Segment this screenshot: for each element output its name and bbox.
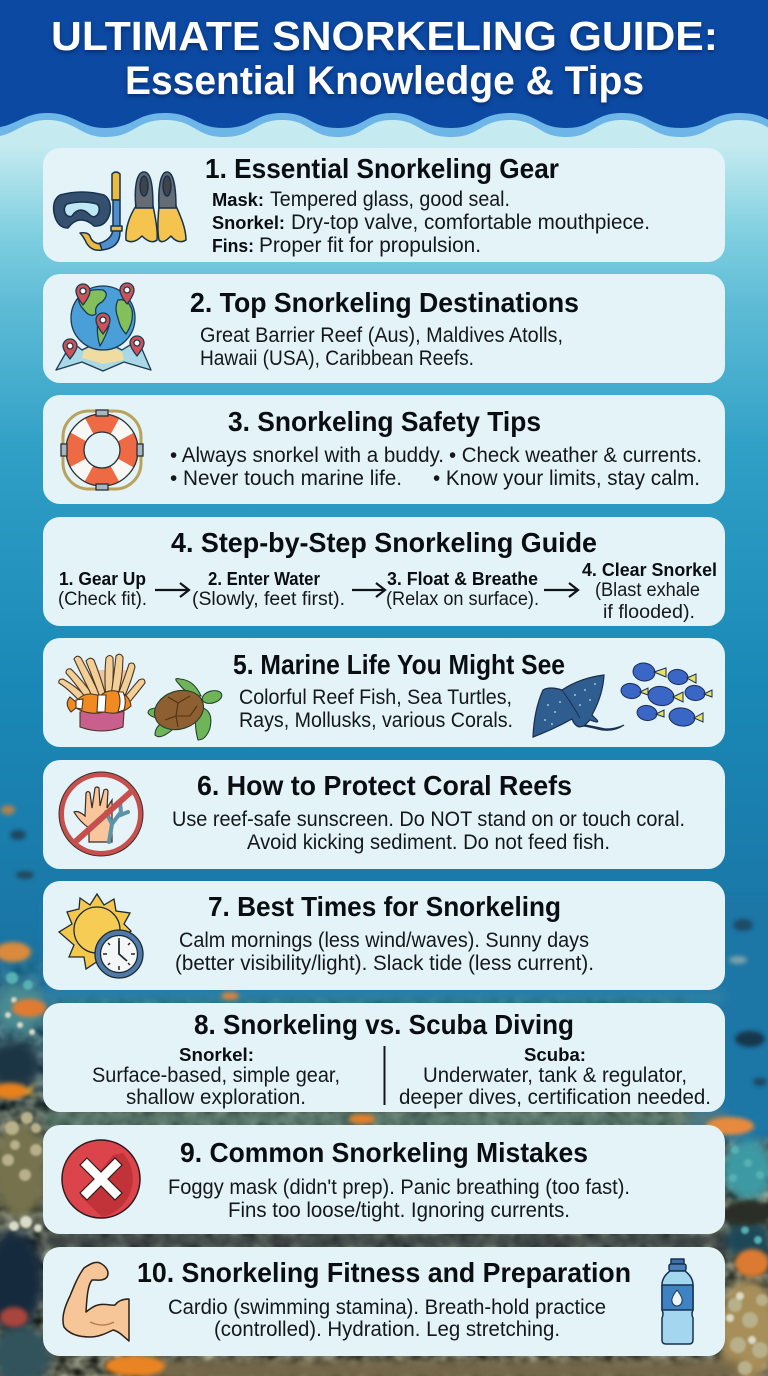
marine life list: Rays, Mollusks, various Corals.: [239, 709, 513, 732]
destination list: Great Barrier Reef (Aus), Maldives Atolls,: [200, 324, 563, 347]
snorkel column: Surface-based, simple gear,: [92, 1064, 340, 1087]
panel 3: safety tips: [43, 395, 725, 504]
arrow: [155, 583, 189, 597]
coral tips: Avoid kicking sediment. Do not feed fish.: [247, 831, 610, 854]
mistakes text: Foggy mask (didn't prep). Panic breathing (too fast).: [168, 1176, 630, 1199]
panel 1: essential gear: [43, 148, 725, 262]
destination list: [200, 324, 563, 370]
safety bullets: • Check weather & currents.: [449, 444, 702, 467]
icon: no touching coral: [59, 772, 143, 856]
gear list: Tempered glass, good seal.: [270, 188, 510, 211]
title: ULTIMATE SNORKELING GUIDE:: [51, 13, 718, 59]
panel 9: common mistakes: [43, 1125, 725, 1234]
icon: anemone and clownfish: [59, 654, 145, 731]
gear list: Proper fit for propulsion.: [259, 234, 481, 257]
marine life list: Colorful Reef Fish, Sea Turtles,: [239, 686, 512, 709]
heading: 2. Top Snorkeling Destinations: [190, 287, 579, 318]
heading: 6. How to Protect Coral Reefs: [197, 770, 572, 801]
icon: sea turtle: [148, 679, 223, 740]
heading: 10. Snorkeling Fitness and Preparation: [137, 1257, 631, 1288]
orange reef fish: [0, 805, 768, 1376]
panel 7: best times: [43, 881, 725, 990]
panel 8: snorkeling vs scuba: [43, 1003, 725, 1112]
gear list: Dry-top valve, comfortable mouthpiece.: [291, 211, 650, 234]
heading: 4. Step-by-Step Snorkeling Guide: [171, 527, 597, 558]
safety bullets: • Always snorkel with a buddy.: [170, 444, 444, 467]
heading: 7. Best Times for Snorkeling: [208, 891, 561, 922]
step 3: 3. Float & Breathe: [387, 568, 538, 589]
icon: school of blue tang: [620, 662, 712, 728]
safety bullets: • Never touch marine life.: [170, 467, 402, 490]
icon: sun and clock: [59, 894, 143, 978]
fitness text: [168, 1296, 606, 1341]
step 4: (Blast exhale: [595, 580, 700, 601]
scuba column: Scuba:: [524, 1044, 586, 1065]
fitness text: (controlled). Hydration. Leg stretching.: [214, 1318, 560, 1341]
step 1: (Check fit).: [58, 589, 147, 610]
best times text: [175, 929, 594, 975]
heading: 1. Essential Snorkeling Gear: [205, 153, 559, 184]
icon: red cross: [62, 1140, 140, 1218]
step 2: [192, 568, 345, 610]
step 3: (Relax on surface).: [386, 589, 539, 610]
panel 10: fitness and preparation: [43, 1247, 725, 1356]
snorkel column: [92, 1044, 340, 1109]
step 2: (Slowly, feet first).: [192, 589, 345, 610]
title: [51, 13, 718, 103]
mistakes text: [168, 1176, 630, 1222]
heading: 3. Snorkeling Safety Tips: [228, 406, 541, 437]
fitness text: Cardio (swimming stamina). Breath-hold practice: [168, 1296, 606, 1319]
best times text: (better visibility/light). Slack tide (less current).: [175, 952, 594, 975]
icon: spotted ray: [533, 675, 624, 737]
heading: 9. Common Snorkeling Mistakes: [180, 1137, 588, 1168]
icon: water bottle: [662, 1259, 693, 1344]
header banner with wave edge: [0, 0, 768, 137]
step 4: [582, 559, 717, 623]
step 2: 2. Enter Water: [208, 568, 320, 589]
coral tips: [172, 808, 685, 854]
arrow: [544, 583, 578, 597]
step 4: if flooded).: [603, 602, 695, 623]
gear list: Fins:: [212, 235, 254, 256]
safety bullets: • Know your limits, stay calm.: [433, 467, 700, 490]
destination list: Hawaii (USA), Caribbean Reefs.: [200, 347, 474, 370]
gear list: [212, 188, 650, 257]
icon: life ring: [61, 410, 143, 490]
snorkel column: Snorkel:: [179, 1044, 254, 1065]
gear list: Snorkel:: [212, 212, 285, 233]
step 1: 1. Gear Up: [59, 568, 146, 589]
scuba column: Underwater, tank & regulator,: [423, 1064, 687, 1087]
scuba column: deeper dives, certification needed.: [399, 1086, 711, 1109]
arrow: [352, 583, 385, 597]
scuba column: [399, 1044, 711, 1109]
gear list: Mask:: [212, 189, 264, 210]
step 4: 4. Clear Snorkel: [582, 559, 717, 580]
panel 4: step-by-step guide: [43, 517, 725, 626]
step 1: [58, 568, 147, 610]
mistakes text: Fins too loose/tight. Ignoring currents.: [228, 1199, 570, 1222]
safety bullets: [170, 444, 702, 490]
coral tips: Use reef-safe sunscreen. Do NOT stand on or touch coral.: [172, 808, 685, 831]
best times text: Calm mornings (less wind/waves). Sunny days: [179, 929, 589, 952]
icon: mask, snorkel and fins: [54, 172, 186, 250]
marine life list: [239, 686, 513, 732]
title: Essential Knowledge & Tips: [125, 59, 644, 103]
step 3: [386, 568, 539, 610]
panel 2: destinations: [43, 274, 725, 383]
panel 5: marine life: [43, 638, 725, 747]
coral clusters: [2, 972, 768, 1375]
heading: 5. Marine Life You Might See: [233, 649, 565, 680]
icon: globe with map and pins: [56, 283, 151, 371]
snorkel column: shallow exploration.: [126, 1086, 306, 1109]
heading: 8. Snorkeling vs. Scuba Diving: [194, 1009, 574, 1040]
icon: flexed arm: [63, 1262, 129, 1341]
panel 6: protect coral: [43, 760, 725, 869]
